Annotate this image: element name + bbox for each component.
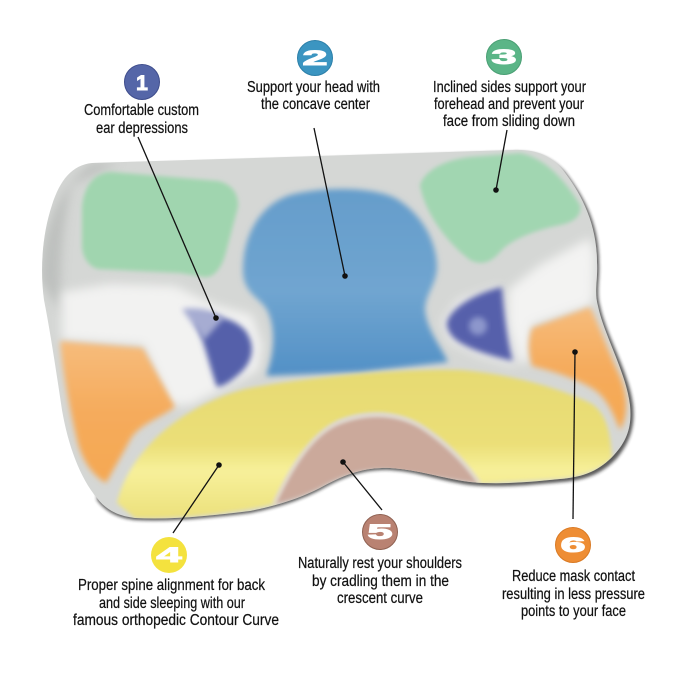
white zone left (62, 284, 262, 405)
badge 3: 3 (492, 46, 516, 69)
pointer line 2 (314, 128, 348, 279)
pillow (40, 150, 633, 521)
badge 4 (151, 537, 187, 573)
text 6: resulting in less pressure (502, 586, 645, 603)
orange zone left (60, 341, 175, 483)
shoulder curve zone (274, 415, 480, 504)
badge 5: 5 (368, 521, 393, 544)
callout 3 (433, 40, 586, 130)
coloured zones (40, 153, 626, 518)
text 4: famous orthopedic Contour Curve (73, 612, 279, 629)
text 6: points to your face (521, 603, 626, 620)
callout 1 (84, 64, 199, 137)
text 3: forehead and prevent your (434, 96, 584, 113)
callout 2 (247, 40, 380, 113)
ear depression left (196, 316, 252, 387)
edge shading (42, 162, 110, 303)
text 2: Support your head with (247, 79, 380, 96)
yellow contour zone (117, 370, 612, 518)
blue zone (243, 189, 448, 376)
text 4: Proper spine alignment for back (78, 577, 265, 594)
ear highlight right (469, 317, 487, 335)
text 1: Comfortable custom (84, 102, 199, 119)
text 6: Reduce mask contact (512, 568, 636, 585)
text 5: by cradling them in the (312, 573, 449, 590)
pillow shadow (92, 152, 633, 521)
badge 1: 1 (136, 72, 148, 95)
text 3: Inclined sides support your (433, 79, 586, 96)
pointer line 4 (173, 462, 222, 533)
text 3: face from sliding down (443, 113, 575, 130)
text 5: Naturally rest your shoulders (298, 555, 462, 572)
callout 6 (502, 528, 645, 620)
badge 5 (362, 514, 398, 550)
badge 6 (556, 528, 590, 562)
pointer line 1 (138, 137, 219, 321)
text 1: ear depressions (96, 120, 188, 137)
badge 2: 2 (302, 47, 328, 70)
callout 5 (298, 514, 462, 607)
ear highlight left (182, 308, 224, 340)
ear depression right (447, 287, 513, 361)
white rim right of ear (442, 286, 516, 366)
pointer line 5 (340, 459, 382, 510)
callout 4 (73, 537, 279, 629)
badge 4: 4 (156, 544, 182, 567)
white zone right (508, 238, 595, 365)
shoulder zone rim (274, 415, 480, 504)
pillow body (42, 150, 630, 519)
green zone left (82, 172, 238, 277)
pointer line 3 (493, 130, 507, 193)
orange zone right (529, 307, 626, 430)
pointer line 6 (572, 349, 578, 519)
green zone right (420, 153, 580, 263)
badge 3 (486, 40, 522, 74)
text 2: the concave center (261, 96, 370, 113)
badge 6: 6 (560, 534, 586, 557)
text 5: crescent curve (337, 590, 423, 607)
text 4: and side sleeping with our (99, 595, 245, 612)
